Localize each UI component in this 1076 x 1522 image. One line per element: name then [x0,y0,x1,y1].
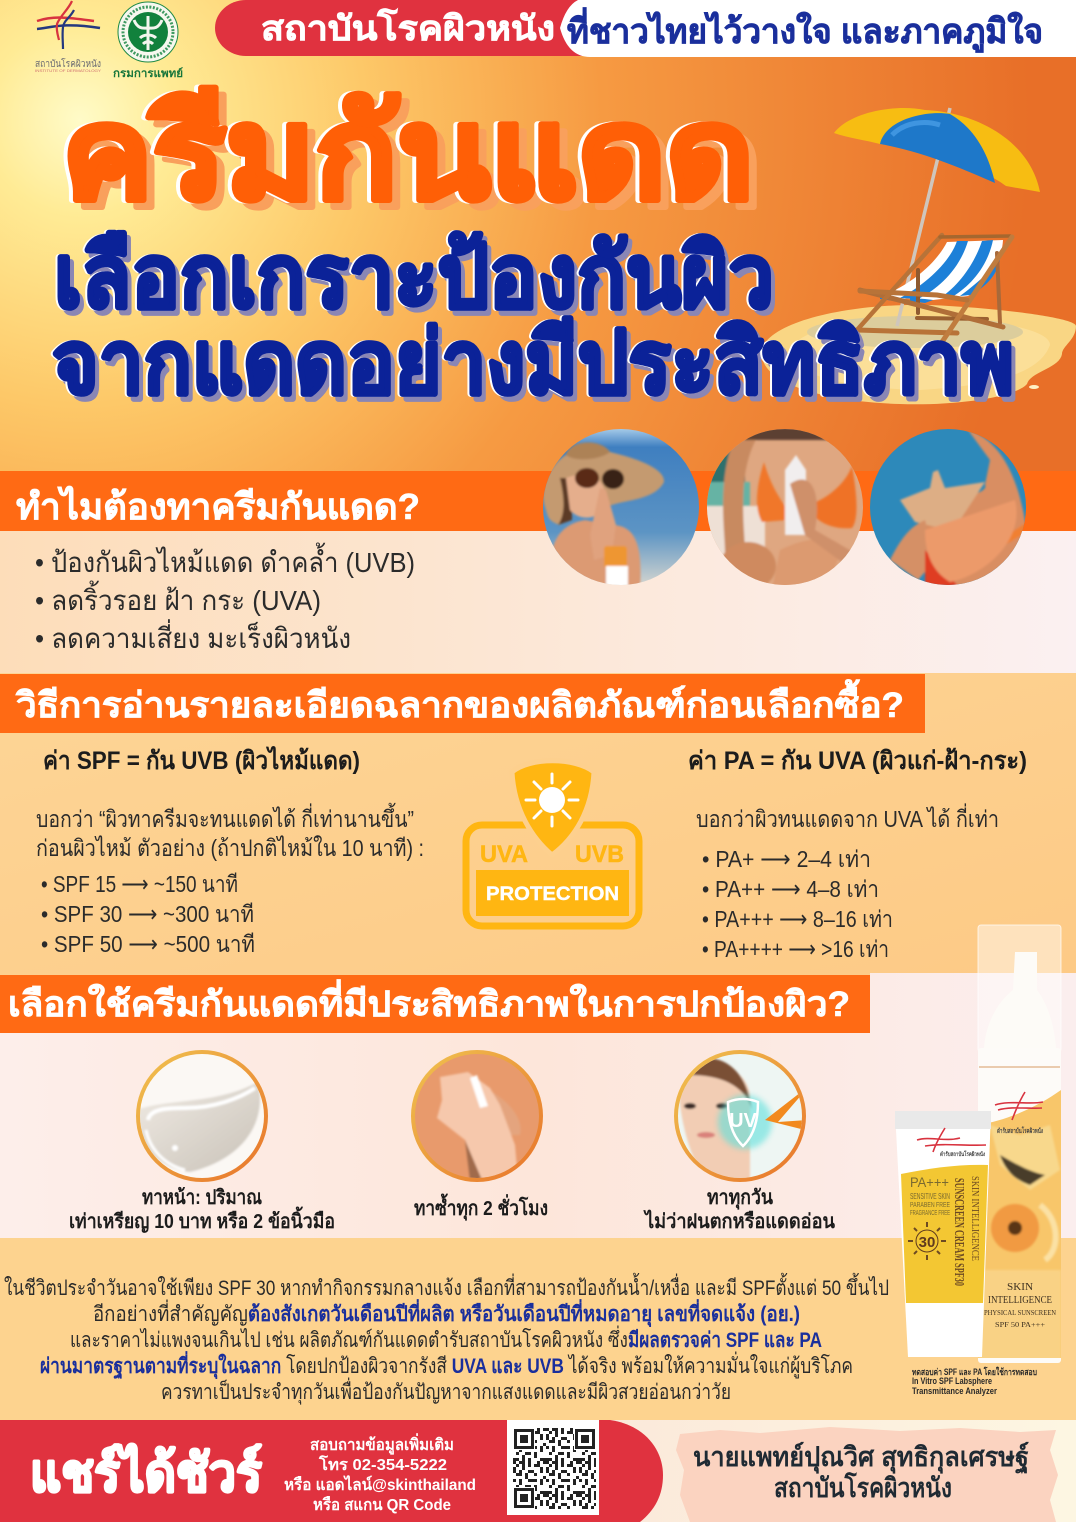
product: sunscreen bottle SPF 50: INTELLIGENCE [988,1295,1052,1306]
background: hero sunlit orange [0,0,1076,475]
text block: reasons: • ลดริ้วรอย ฝ้า กระ (UVA) [35,580,321,616]
text block: advice paragraph: อีกอย่างที่สำคัญคัญต้องสังเกตวันเดือนปีที่ผลิต หรือวันเดือนปีที่หมดอายุ เลขที่จดแจ้ง (อย.) [93,1298,800,1328]
product: sunscreen tube SPF 30: 30 [919,1234,935,1251]
product: sunscreen tube SPF 30: SKIN INTELLIGENCE [969,1176,981,1261]
icon circle: cream swatch [69,1050,335,1233]
caption: ทาหน้า: ปริมาณ [142,1186,262,1209]
icon circle: UV shield on face: UV [729,1110,758,1132]
logo: department of medical services: กรมการแพทย์ [113,67,183,80]
top banner [215,0,1076,57]
icon circle: cream swatch: เท่าเหรียญ 10 บาท หรือ 2 ข้อนิ้วมือ [69,1206,335,1233]
icon: UVA UVB protection badge: UVA [480,841,528,868]
PA list: • PA+ ⟶ 2–4 เท่า [702,846,871,872]
heading bar: why use sunscreen [0,471,1076,531]
text block: advice paragraph: และราคาไม่แพงจนเกินไป เช่น ผลิตภัณฑ์กันแดดตำรับสถาบันโรคผิวหนัง ซึ่งมีผลตรวจค่า SPF และ PA [70,1325,822,1352]
title line 2: เลือกเกราะป้องกันผิว [58,232,778,331]
product: sunscreen tube SPF 30: PA+++ [910,1174,949,1190]
banner text left: สถาบันโรคผิวหนัง [261,8,555,48]
heading bar: reading labels: วิธีการอ่านรายละเอียดฉลากของผลิตภัณฑ์ก่อนเลือกซื้อ? [15,679,904,725]
icon: UVA UVB protection badge: UVB [575,841,624,868]
footer right: author panel: สถาบันโรคผิวหนัง [774,1471,952,1503]
clear cap [978,925,1061,1052]
product: sunscreen tube SPF 30: PARABEN FREE [910,1202,950,1209]
bottle logo [995,1092,1043,1120]
title [50,83,1018,417]
PA list: • PA++++ ⟶ >16 เท่า [702,936,889,962]
product: sunscreen bottle SPF 50: ตำรับสถาบันโรคผิวหนัง [997,1126,1043,1135]
heading bar: choose effective sunscreen [0,975,870,1033]
text block: advice paragraph: ผ่านมาตรฐานตามที่ระบุในฉลาก โดยปกป้องผิวจากรังสี UVA และ UVB ได้จริง พร้อมให้ความมั่นใจแก่ผู้บริโภค [40,1350,853,1380]
SPF list: • SPF 50 ⟶ ~500 นาที [41,931,255,957]
umbrella canopy [834,108,1040,192]
chair frame [857,235,1012,345]
title line 2: เลือกเกราะป้องกันผิว [54,227,774,326]
text block: reasons: • ป้องกันผิวไหม้แดด ดำคล้ำ (UVB) [35,542,415,578]
product: sunscreen tube SPF 30: SUNSCREEN CREAM SPF30 [951,1178,966,1286]
panel: label reading background [0,673,1076,976]
heading bar: why use sunscreen: ทำไมต้องทาครีมกันแดด? [16,485,420,527]
caption: product test note: In Vitro SPF Labsphere [912,1376,992,1386]
contact details: หรือ แอดไลน์@skinthailand [284,1475,476,1494]
title line 1: sunscreen: ครีมกันแดด [58,83,750,226]
illustration: beach umbrella and chair [762,108,1076,404]
pump [984,952,1056,1048]
photo: woman in sun hat applying sunscreen [540,428,700,590]
text block: SPF [36,745,424,957]
product: sunscreen bottle SPF 50: PHYSICAL SUNSCREEN [984,1309,1056,1317]
panel: why sunscreen background [0,530,1076,674]
footer left: share panel [0,1420,663,1522]
caption: product test note: ทดสอบค่า SPF และ PA โดยใช้การทดสอบ [912,1366,1037,1377]
logo: institute of dermatology: INSTITUTE OF DERMATOLOGY [35,68,101,73]
logo: institute of dermatology: สถาบันโรคผิวหนัง [35,57,101,70]
sand [762,305,1076,404]
panel: effective use background [0,973,1076,1239]
top logos [35,1,183,80]
umbrella pole [897,108,950,326]
heading bar: choose effective sunscreen: เลือกใช้ครีมกันแดดที่มีประสิทธิภาพในการปกป้องผิว? [8,979,850,1024]
footer right: author panel: นายแพทย์ปุณวิศ สุทธิกุลเศรษฐ์ [693,1441,1029,1475]
text block: PA: บอกว่าผิวทนแดดจาก UVA ได้ กี่เท่า [696,803,999,832]
caption: ทาทุกวัน [707,1187,773,1210]
text block: advice paragraph [4,1273,889,1405]
share slogan: แชร์ได้ชัวร์ [30,1443,262,1503]
contact details [284,1433,476,1514]
panel: advice background [0,1238,1076,1420]
text block: reasons [35,542,415,654]
text block: advice paragraph: ควรทาเป็นประจำทุกวันเพื่อป้องกันปัญหาจากแสงแดดและมีผิวสวยอ่อนกว่าวัย [161,1377,731,1405]
text block: reasons: • ลดความเสี่ยง มะเร็งผิวหนัง [35,619,351,654]
photo: woman in orange bikini with spray bottle [707,429,863,585]
text block: SPF: บอกว่า “ผิวทาครีมจะทนแดดได้ กี่เท่านานขึ้น” [36,803,414,832]
contact details: หรือ สแกน QR Code [313,1496,451,1514]
footer right: author panel [600,1420,1076,1522]
photo: applying sunscreen to shoulder [868,428,1030,590]
QR code [507,1420,599,1515]
product: sunscreen tube SPF 30 [895,1111,991,1357]
title line 1: sunscreen: ครีมกันแดด [70,90,762,233]
bottle body [978,1048,1061,1363]
product: sunscreen bottle SPF 50: SPF 50 PA+++ [995,1321,1045,1329]
SPF heading: ค่า SPF = กัน UVB (ผิวไหม้แดด) [43,745,360,775]
caption: product test note: Transmittance Analyzer [912,1386,997,1396]
product: sunscreen tube SPF 30: SENSITIVE SKIN [910,1192,950,1201]
product: sunscreen bottle SPF 50: SKIN [1007,1282,1033,1293]
caption: product test note [912,1366,1037,1396]
product: sunscreen tube SPF 30: FRAGRANCE FREE [910,1210,950,1217]
icon circle: UV shield on face: ไม่ว่าฝนตกหรือแดดอ่อน [643,1209,835,1233]
icon circle: hands applying cream [413,1052,548,1221]
title line 2: เลือกเกราะป้องกันผิว [52,227,772,326]
banner text right: ที่ชาวไทยไว้วางใจ และภาคภูมิใจ [567,7,1043,53]
product: sunscreen bottle SPF 50 [978,925,1061,1363]
text block: PA [688,747,1027,962]
chair fabric [880,240,1003,300]
heading bar: reading labels [0,674,925,733]
PA list: • PA+++ ⟶ 8–16 เท่า [702,906,893,932]
text block: advice paragraph: ในชีวิตประจำวันอาจใช้เพียง SPF 30 หากทำกิจกรรมกลางแจ้ง เลือกที่สามารถป้องกันน้ำ/เหงื่อ และมี SPFตั้งแต่ 50 ขึ้นไป [4,1273,889,1300]
logo: department of medical services [113,2,183,80]
icon: UVA UVB protection badge [466,761,639,926]
contact details: สอบถามข้อมูลเพิ่มเติม [310,1433,454,1456]
product: sunscreen tube SPF 30: ตำรับสถาบันโรคผิวหนัง [940,1150,985,1158]
logo: institute of dermatology [35,1,101,73]
text block: SPF: ก่อนผิวไหม้ ตัวอย่าง (ถ้าปกติไหม้ใน 10 นาที) : [36,835,424,861]
icon: UVA UVB protection badge: PROTECTION [486,884,619,905]
SPF list [41,871,255,957]
SPF list: • SPF 15 ⟶ ~150 นาที [41,871,238,897]
PA heading: ค่า PA = กัน UVA (ผิวแก่-ฝ้า-กระ) [688,747,1027,775]
PA list: • PA++ ⟶ 4–8 เท่า [702,876,879,902]
icon circle: UV shield on face [643,1052,835,1233]
contact details: โทร 02-354-5222 [318,1454,447,1474]
PA list [702,846,893,962]
SPF list: • SPF 30 ⟶ ~300 นาที [41,901,254,927]
caption: ทาซ้ำทุก 2 ชั่วโมง [414,1193,548,1221]
title line 1: sunscreen: ครีมกันแดด [62,83,754,226]
